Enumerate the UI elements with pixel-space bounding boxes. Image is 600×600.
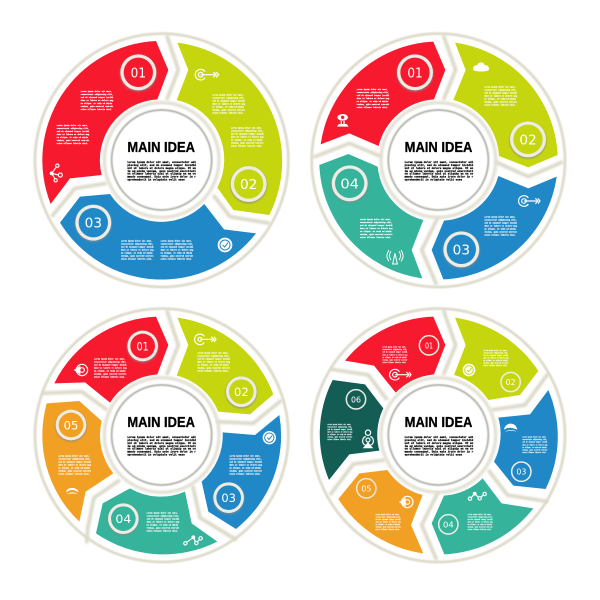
icon: target bbox=[390, 369, 411, 380]
text block: consectetur adipiscing elit, bbox=[382, 349, 407, 351]
text block: consectetur adipiscing elit, bbox=[161, 242, 193, 245]
body text: Lorem ipsum dolor sit amet, consectetur adi bbox=[127, 435, 196, 439]
text block: veniam, quis nostrud exercit bbox=[522, 449, 547, 451]
body text: on ullamco laboris nisi ut aliquip ex ea co bbox=[405, 172, 474, 176]
text block: Lorem ipsum dolor sit amet, bbox=[161, 239, 193, 242]
segment 04 teal bbox=[96, 488, 217, 554]
text block: dunt ut labore et dolore mag bbox=[229, 463, 263, 466]
cycle diagram: six steps bbox=[312, 309, 565, 562]
segment 01 red bbox=[345, 317, 445, 393]
text block: dunt ut labore et dolore mag bbox=[382, 354, 407, 356]
text block: sed do eiusmod tempor incidi bbox=[484, 222, 518, 225]
text block: veniam, quis nostrud exercit bbox=[357, 103, 389, 106]
segment 05 orange bbox=[338, 470, 423, 553]
text block: consectetur adipiscing elit, bbox=[81, 93, 113, 96]
badge 04: 04 bbox=[340, 177, 359, 192]
text block: sed do eiusmod tempor incidi bbox=[94, 363, 127, 366]
text block: sed do eiusmod tempor incidi bbox=[121, 245, 154, 248]
text block: ation ullamco laboris nisi. bbox=[468, 529, 492, 531]
body text: unt ut labore et dolore magna aliqua. Ut en bbox=[405, 166, 474, 170]
text block: na aliqua. Ut enim ad minim bbox=[57, 136, 89, 139]
text block: consectetur adipiscing elit, bbox=[229, 457, 262, 460]
text block: Lorem ipsum dolor sit amet, bbox=[484, 86, 517, 89]
text block: dunt ut labore et dolore mag bbox=[468, 522, 493, 524]
text block: dunt ut labore et dolore mag bbox=[327, 432, 352, 434]
text block: ation ullamco laboris nisi. bbox=[376, 529, 400, 531]
text block: veniam, quis nostrud exercit bbox=[229, 469, 262, 472]
text block: consectetur adipiscing elit, bbox=[376, 517, 401, 519]
text block: sed do eiusmod tempor incidi bbox=[58, 460, 92, 463]
text block: na aliqua. Ut enim ad minim bbox=[197, 364, 230, 367]
text block: na aliqua. Ut enim ad minim bbox=[161, 251, 193, 254]
badge 03: 03 bbox=[85, 217, 102, 232]
text block: na aliqua. Ut enim ad minim bbox=[468, 524, 492, 526]
text block: na aliqua. Ut enim ad minim bbox=[94, 369, 126, 372]
text block: sed do eiusmod tempor incidi bbox=[327, 429, 352, 431]
text block: na aliqua. Ut enim ad minim bbox=[360, 230, 392, 233]
text block: veniam, quis nostrud exercit bbox=[212, 108, 245, 111]
segment 02 green bbox=[453, 43, 558, 167]
segment 03 blue bbox=[432, 176, 557, 279]
icon: target bbox=[195, 69, 219, 80]
icon: eye tower bbox=[337, 114, 349, 127]
text block: Lorem ipsum dolor sit amet, bbox=[58, 454, 91, 457]
text block: ation ullamco laboris nisi. bbox=[382, 362, 406, 364]
text block: consectetur adipiscing elit, bbox=[147, 515, 179, 518]
text block: sed do eiusmod tempor incidi bbox=[483, 355, 508, 357]
icon: antenna bbox=[387, 250, 403, 264]
text block: Lorem ipsum dolor sit amet, bbox=[231, 127, 264, 130]
text block: dunt ut labore et dolore mag bbox=[121, 248, 154, 251]
text block: veniam, quis nostrud exercit bbox=[484, 101, 517, 104]
body text: im ad minim veniam, quis nostrud exercitati bbox=[127, 444, 196, 448]
body text: mmodo consequat. Duis aute irure dolor in r bbox=[405, 450, 474, 454]
body text: mmodo consequat. Duis aute irure dolor in r bbox=[127, 450, 196, 454]
body text: on ullamco laboris nisi ut aliquip ex ea co bbox=[127, 172, 196, 176]
text block: consectetur adipiscing elit, bbox=[468, 517, 493, 519]
text block: Lorem ipsum dolor sit amet, bbox=[382, 347, 407, 349]
icon: target bbox=[195, 334, 216, 345]
text block: consectetur adipiscing elit, bbox=[522, 439, 547, 441]
text block: Lorem ipsum dolor sit amet, bbox=[57, 124, 89, 127]
icon: line chart bbox=[468, 492, 486, 500]
text block: na aliqua. Ut enim ad minim bbox=[484, 98, 517, 101]
text block: sed do eiusmod tempor incidi bbox=[147, 518, 180, 521]
icon: clock bbox=[263, 431, 276, 444]
body text: unt ut labore et dolore magna aliqua. Ut en bbox=[127, 166, 196, 170]
badge 01: 01 bbox=[407, 66, 423, 81]
body text: piscing elit, sed do eiusmod tempor incidid bbox=[127, 438, 196, 442]
segment 06 dark teal bbox=[320, 380, 383, 480]
icon: hat bbox=[66, 488, 79, 494]
title: MAIN IDEA bbox=[127, 140, 195, 156]
text block: ation ullamco laboris nisi. bbox=[484, 104, 516, 107]
text block: sed do eiusmod tempor incidi bbox=[212, 99, 246, 102]
text block: Lorem ipsum dolor sit amet, bbox=[212, 93, 245, 96]
icon: person bbox=[363, 430, 373, 448]
segment 01 red bbox=[321, 42, 445, 146]
text block: veniam, quis nostrud exercit bbox=[484, 231, 517, 234]
text block: sed do eiusmod tempor incidi bbox=[522, 442, 547, 444]
text block: ation ullamco laboris nisi. bbox=[58, 472, 90, 475]
title: MAIN IDEA bbox=[127, 415, 195, 431]
badge 04: 04 bbox=[443, 520, 454, 529]
text block: sed do eiusmod tempor incidi bbox=[231, 133, 264, 136]
text block: na aliqua. Ut enim ad minim bbox=[229, 466, 262, 469]
text block: na aliqua. Ut enim ad minim bbox=[484, 228, 517, 231]
text block: sed do eiusmod tempor incidi bbox=[376, 519, 401, 521]
badge 03: 03 bbox=[221, 491, 236, 505]
text block: sed do eiusmod tempor incidi bbox=[81, 96, 114, 99]
segment 04 teal bbox=[432, 478, 533, 554]
text block: ation ullamco laboris nisi. bbox=[121, 257, 152, 260]
text block: Lorem ipsum dolor sit amet, bbox=[121, 239, 154, 242]
body text: mmodo consequat. Duis aute irure dolor in r bbox=[405, 175, 474, 179]
text block: veniam, quis nostrud exercit bbox=[94, 372, 127, 375]
text block: veniam, quis nostrud exercit bbox=[147, 527, 179, 530]
body text: Lorem ipsum dolor sit amet, consectetur adi bbox=[405, 435, 474, 439]
text block: dunt ut labore et dolore mag bbox=[360, 227, 393, 230]
text block: na aliqua. Ut enim ad minim bbox=[212, 105, 245, 108]
text block: veniam, quis nostrud exercit bbox=[382, 359, 407, 361]
segment 03 blue bbox=[494, 390, 558, 489]
body text: piscing elit, sed do eiusmod tempor incidid bbox=[405, 438, 474, 442]
segment 04 teal bbox=[319, 154, 423, 278]
text block: consectetur adipiscing elit, bbox=[484, 89, 517, 92]
body text: on ullamco laboris nisi ut aliquip ex ea co bbox=[127, 447, 196, 451]
text block: veniam, quis nostrud exercit bbox=[121, 254, 154, 257]
text block: dunt ut labore et dolore mag bbox=[58, 463, 92, 466]
icon: hat bbox=[504, 424, 517, 432]
text block: dunt ut labore et dolore mag bbox=[484, 95, 518, 98]
text block: na aliqua. Ut enim ad minim bbox=[58, 466, 91, 469]
text block: dunt ut labore et dolore mag bbox=[522, 444, 547, 446]
icon: line chart bbox=[184, 536, 202, 545]
text block: ation ullamco laboris nisi. bbox=[522, 452, 546, 454]
text block: dunt ut labore et dolore mag bbox=[147, 521, 180, 524]
body text: piscing elit, sed do eiusmod tempor incidid bbox=[127, 163, 196, 167]
text block: na aliqua. Ut enim ad minim bbox=[357, 100, 389, 103]
text block: na aliqua. Ut enim ad minim bbox=[376, 524, 400, 526]
text block: Lorem ipsum dolor sit amet, bbox=[484, 216, 517, 219]
icon: cloud bbox=[473, 62, 489, 71]
text block: veniam, quis nostrud exercit bbox=[360, 233, 393, 236]
segment 01 red bbox=[42, 41, 168, 204]
icon: clock bbox=[463, 364, 475, 376]
text block: veniam, quis nostrud exercit bbox=[231, 142, 264, 145]
text block: ation ullamco laboris nisi. bbox=[484, 234, 516, 237]
text block: Lorem ipsum dolor sit amet, bbox=[522, 437, 547, 439]
text block: ation ullamco laboris nisi. bbox=[483, 365, 507, 367]
text block: veniam, quis nostrud exercit bbox=[376, 527, 401, 529]
text block: Lorem ipsum dolor sit amet, bbox=[94, 357, 127, 360]
text block: sed do eiusmod tempor incidi bbox=[382, 352, 407, 354]
text block: consectetur adipiscing elit, bbox=[231, 130, 264, 133]
badge 01: 01 bbox=[425, 341, 433, 350]
cycle diagram: three steps bbox=[35, 34, 288, 287]
text block: consectetur adipiscing elit, bbox=[357, 91, 389, 94]
text block: na aliqua. Ut enim ad minim bbox=[121, 251, 153, 254]
body text: on ullamco laboris nisi ut aliquip ex ea co bbox=[405, 447, 474, 451]
outer ring bbox=[312, 309, 565, 562]
center hub bbox=[107, 105, 216, 215]
badge 03 bbox=[75, 205, 112, 242]
badge 02: 02 bbox=[519, 133, 537, 148]
text block: consectetur adipiscing elit, bbox=[57, 127, 89, 130]
body text: Lorem ipsum dolor sit amet, consectetur adi bbox=[127, 160, 196, 164]
text block: veniam, quis nostrud exercit bbox=[57, 139, 89, 142]
text block: ation ullamco laboris nisi. bbox=[229, 472, 261, 475]
text block: ation ullamco laboris nisi. bbox=[360, 236, 391, 239]
cycle diagram: five steps bbox=[35, 309, 288, 562]
text block: consectetur adipiscing elit, bbox=[484, 219, 517, 222]
text block: consectetur adipiscing elit, bbox=[197, 355, 230, 358]
badge 04: 04 bbox=[115, 512, 131, 526]
badge 05: 05 bbox=[64, 418, 78, 432]
outer ring bbox=[35, 34, 288, 287]
text block: consectetur adipiscing elit, bbox=[327, 427, 352, 429]
outer ring bbox=[35, 309, 288, 562]
body text: piscing elit, sed do eiusmod tempor incidid bbox=[405, 163, 474, 167]
text block: consectetur adipiscing elit, bbox=[94, 360, 127, 363]
text block: ation ullamco laboris nisi. bbox=[94, 375, 125, 378]
text block: na aliqua. Ut enim ad minim bbox=[382, 357, 406, 359]
text block: ation ullamco laboris nisi. bbox=[231, 145, 262, 148]
text block: Lorem ipsum dolor sit amet, bbox=[229, 454, 262, 457]
body text: Lorem ipsum dolor sit amet, consectetur adi bbox=[405, 160, 474, 164]
text block: sed do eiusmod tempor incidi bbox=[468, 519, 493, 521]
segment 01 red bbox=[54, 317, 168, 403]
text block: na aliqua. Ut enim ad minim bbox=[147, 524, 179, 527]
text block: consectetur adipiscing elit, bbox=[483, 353, 508, 355]
text block: ation ullamco laboris nisi. bbox=[81, 108, 112, 111]
text block: dunt ut labore et dolore mag bbox=[81, 99, 114, 102]
badge 01: 01 bbox=[137, 339, 149, 353]
center hub bbox=[107, 380, 216, 490]
title: MAIN IDEA bbox=[405, 140, 472, 156]
center hub bbox=[384, 105, 493, 215]
text block: Lorem ipsum dolor sit amet, bbox=[327, 424, 352, 426]
icon: arrow target bbox=[399, 496, 413, 508]
text block: veniam, quis nostrud exercit bbox=[327, 437, 352, 439]
text block: ation ullamco laboris nisi. bbox=[327, 439, 351, 441]
badge 02: 02 bbox=[234, 385, 249, 399]
text block: na aliqua. Ut enim ad minim bbox=[522, 447, 546, 449]
badge 02: 02 bbox=[506, 378, 516, 387]
icon: nodes bbox=[50, 164, 62, 182]
outer ring bbox=[312, 34, 565, 287]
body text: eprehenderit in voluptate velit esse bbox=[127, 453, 185, 457]
text block: ation ullamco laboris nisi. bbox=[197, 370, 229, 373]
text block: consectetur adipiscing elit, bbox=[58, 457, 91, 460]
text block: ation ullamco laboris nisi. bbox=[57, 142, 88, 145]
text block: veniam, quis nostrud exercit bbox=[468, 527, 493, 529]
text block: consectetur adipiscing elit, bbox=[121, 242, 154, 245]
text block: sed do eiusmod tempor incidi bbox=[484, 92, 518, 95]
text block: Lorem ipsum dolor sit amet, bbox=[468, 514, 493, 516]
text block: sed do eiusmod tempor incidi bbox=[360, 224, 393, 227]
cycle diagram: four steps bbox=[312, 34, 565, 287]
text block: sed do eiusmod tempor incidi bbox=[229, 460, 263, 463]
text block: Lorem ipsum dolor sit amet, bbox=[197, 352, 230, 355]
text block: Lorem ipsum dolor sit amet, bbox=[376, 514, 401, 516]
badge 01: 01 bbox=[131, 66, 146, 81]
badge 03: 03 bbox=[453, 243, 470, 258]
text block: ation ullamco laboris nisi. bbox=[212, 111, 244, 114]
text block: Lorem ipsum dolor sit amet, bbox=[147, 512, 179, 515]
badge 02: 02 bbox=[240, 178, 257, 193]
text block: Lorem ipsum dolor sit amet, bbox=[81, 90, 113, 93]
segment 03 blue bbox=[60, 194, 256, 280]
text block: na aliqua. Ut enim ad minim bbox=[81, 102, 113, 105]
text block: dunt ut labore et dolore mag bbox=[212, 102, 246, 105]
text block: consectetur adipiscing elit, bbox=[360, 221, 393, 224]
body text: unt ut labore et dolore magna aliqua. Ut en bbox=[405, 441, 474, 445]
body text: mmodo consequat. Duis aute irure dolor in r bbox=[127, 175, 196, 179]
text block: dunt ut labore et dolore mag bbox=[357, 97, 390, 100]
segment 02 green bbox=[454, 318, 538, 400]
text block: dunt ut labore et dolore mag bbox=[231, 136, 264, 139]
text block: dunt ut labore et dolore mag bbox=[197, 361, 231, 364]
center hub bbox=[384, 380, 493, 490]
icon: arrow target bbox=[74, 364, 88, 376]
badge 03: 03 bbox=[516, 468, 526, 477]
text block: dunt ut labore et dolore mag bbox=[376, 522, 401, 524]
text block: consectetur adipiscing elit, bbox=[212, 96, 245, 99]
body text: im ad minim veniam, quis nostrud exercitati bbox=[405, 169, 474, 173]
icon: clock bbox=[218, 238, 232, 252]
text block: veniam, quis nostrud exercit bbox=[483, 363, 508, 365]
text block: sed do eiusmod tempor incidi bbox=[197, 358, 231, 361]
segment 02 green bbox=[177, 318, 273, 414]
text block: dunt ut labore et dolore mag bbox=[484, 225, 518, 228]
segment 05 orange bbox=[42, 401, 113, 522]
badge 06: 06 bbox=[351, 395, 361, 404]
text block: dunt ut labore et dolore mag bbox=[161, 248, 194, 251]
text block: Lorem ipsum dolor sit amet, bbox=[483, 350, 508, 352]
segment 02 green bbox=[177, 43, 282, 215]
text block: veniam, quis nostrud exercit bbox=[161, 254, 193, 257]
icon: target bbox=[519, 196, 540, 206]
text block: veniam, quis nostrud exercit bbox=[197, 367, 230, 370]
text block: dunt ut labore et dolore mag bbox=[57, 133, 90, 136]
body text: eprehenderit in voluptate velit esse bbox=[405, 453, 462, 457]
text block: na aliqua. Ut enim ad minim bbox=[231, 139, 263, 142]
body text: unt ut labore et dolore magna aliqua. Ut en bbox=[127, 441, 196, 445]
text block: veniam, quis nostrud exercit bbox=[81, 105, 113, 108]
text block: na aliqua. Ut enim ad minim bbox=[483, 360, 507, 362]
segment 03 blue bbox=[202, 415, 281, 529]
text block: ation ullamco laboris nisi. bbox=[357, 106, 388, 109]
text block: na aliqua. Ut enim ad minim bbox=[327, 434, 351, 436]
text block: dunt ut labore et dolore mag bbox=[94, 366, 127, 369]
text block: ation ullamco laboris nisi. bbox=[161, 257, 192, 260]
text block: ation ullamco laboris nisi. bbox=[147, 530, 178, 533]
badge 05: 05 bbox=[361, 484, 371, 493]
badge 01 bbox=[120, 54, 157, 92]
title: MAIN IDEA bbox=[405, 415, 472, 431]
text block: sed do eiusmod tempor incidi bbox=[161, 245, 194, 248]
body text: eprehenderit in voluptate velit esse bbox=[405, 178, 462, 182]
text block: Lorem ipsum dolor sit amet, bbox=[357, 88, 389, 91]
text block: sed do eiusmod tempor incidi bbox=[57, 130, 90, 133]
body text: im ad minim veniam, quis nostrud exercitati bbox=[127, 169, 196, 173]
text block: sed do eiusmod tempor incidi bbox=[357, 94, 390, 97]
body text: im ad minim veniam, quis nostrud exercitati bbox=[405, 444, 474, 448]
badge 02 bbox=[230, 166, 267, 204]
text block: Lorem ipsum dolor sit amet, bbox=[360, 218, 393, 221]
text block: dunt ut labore et dolore mag bbox=[483, 358, 508, 360]
body text: eprehenderit in voluptate velit esse bbox=[127, 178, 185, 182]
text block: veniam, quis nostrud exercit bbox=[58, 469, 91, 472]
